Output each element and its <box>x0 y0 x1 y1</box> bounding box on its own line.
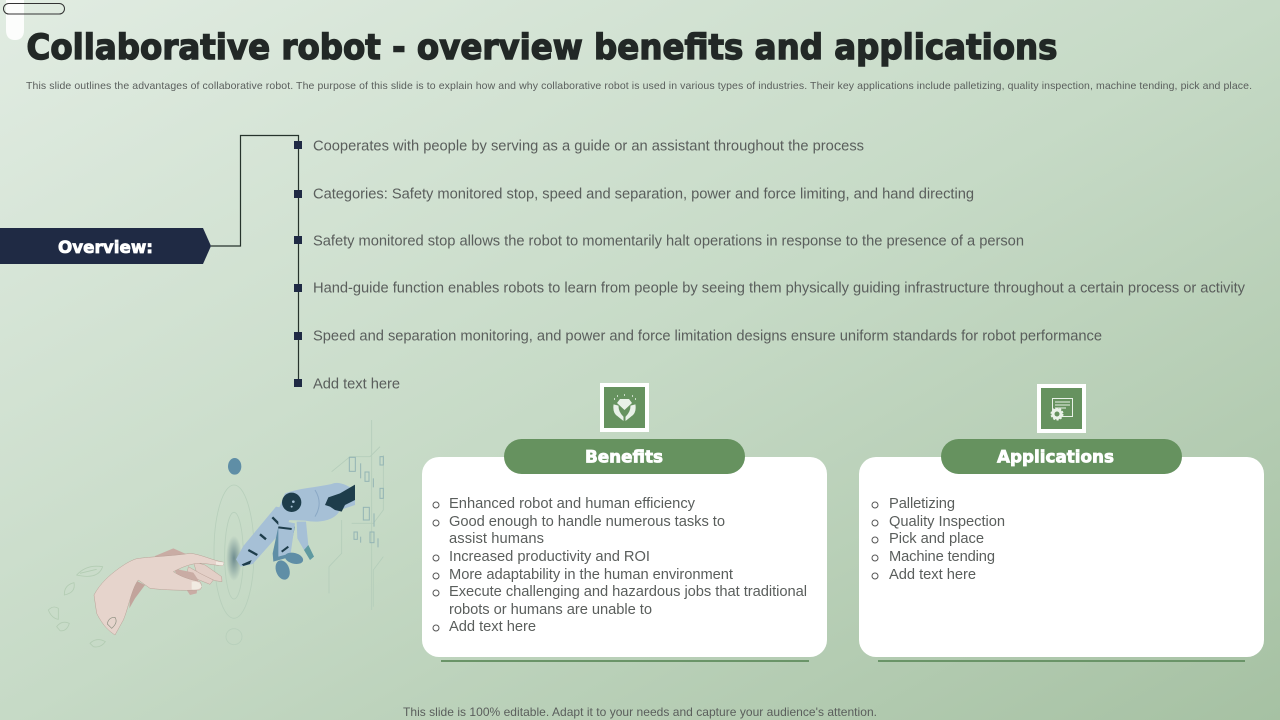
icon: document with gear <box>1037 384 1086 433</box>
illustration: human hand reaching robot hand <box>48 420 383 647</box>
overview list: Safety monitored stop allows the robot to momentarily halt operations in response to the presence of a person <box>313 234 1024 250</box>
card <box>859 457 1264 657</box>
applications list: Pick and place <box>889 531 984 547</box>
overview list: Speed and separation monitoring, and power and force limitation designs ensure uniform standards for robot performance <box>313 328 1102 344</box>
robot lower fingers <box>273 527 295 562</box>
applications list <box>872 496 1005 583</box>
portal rings <box>214 485 254 645</box>
portal glow <box>226 536 242 581</box>
applications list: Machine tending <box>889 549 995 565</box>
forearm shadow <box>129 578 145 608</box>
banner: overview <box>0 228 211 264</box>
underline <box>878 660 1245 662</box>
benefits list: More adaptability in the human environment <box>449 567 733 583</box>
panel: benefits <box>422 383 827 662</box>
leaves <box>48 566 105 647</box>
back shadow <box>155 548 186 565</box>
footer note: This slide is 100% editable. Adapt it to your needs and capture your audience's attention. <box>403 705 877 719</box>
panel: applications <box>859 384 1264 662</box>
heading pill: Benefits <box>585 448 663 468</box>
robot index arm <box>236 507 293 567</box>
icon: diamond in hands <box>600 383 649 432</box>
rear fingers <box>193 562 222 582</box>
heading pill <box>504 439 745 474</box>
wrist leaf <box>107 617 116 628</box>
overview list: Cooperates with people by serving as a guide or an assistant throughout the process <box>313 138 864 154</box>
overview list: Categories: Safety monitored stop, speed and separation, power and force limiting, and hand directing <box>313 186 974 202</box>
overview list <box>294 138 1246 392</box>
hand <box>94 548 224 635</box>
robot arm <box>278 483 355 522</box>
fingertip nails <box>192 562 224 590</box>
applications list: Quality Inspection <box>889 514 1005 530</box>
card <box>422 457 827 657</box>
applications list: Palletizing <box>889 496 955 512</box>
palm and wrist <box>94 553 224 635</box>
decoration: top-left tab <box>6 0 24 40</box>
overview list: Add text here <box>313 376 400 392</box>
subtitle: This slide outlines the advantages of collaborative robot. The purpose of this slide is to explain how and why collaborative robot is used in various types of industries. Their key applications include palletizing, quality inspection, machine tending, pick and place. <box>26 80 1252 92</box>
benefits list <box>433 496 807 635</box>
benefits list: robots or humans are unable to <box>449 602 652 618</box>
decoration: top-left capsule <box>4 4 64 14</box>
circuit lines <box>329 420 383 610</box>
benefits list: Execute challenging and hazardous jobs that traditional <box>449 584 807 600</box>
heading pill: Applications <box>997 448 1114 468</box>
applications list: Add text here <box>889 567 976 583</box>
overview list: Hand-guide function enables robots to learn from people by seeing them physically guiding infrastructure throughout a certain process or activity <box>313 280 1246 296</box>
robot head joint <box>282 493 301 512</box>
portal top dot <box>228 458 241 475</box>
title: Collaborative robot - overview benefits and applications <box>26 28 1058 68</box>
benefits list: Enhanced robot and human efficiency <box>449 496 696 512</box>
benefits list: Add text here <box>449 619 536 635</box>
benefits list: Increased productivity and ROI <box>449 549 650 565</box>
robot wrist joint <box>325 485 355 512</box>
benefits list: Good enough to handle numerous tasks to <box>449 514 725 530</box>
banner: overview: Overview: <box>58 238 153 258</box>
underline <box>441 660 809 662</box>
connector: overview to list <box>211 136 298 383</box>
heading pill <box>941 439 1182 474</box>
benefits list: assist humans <box>449 531 544 547</box>
